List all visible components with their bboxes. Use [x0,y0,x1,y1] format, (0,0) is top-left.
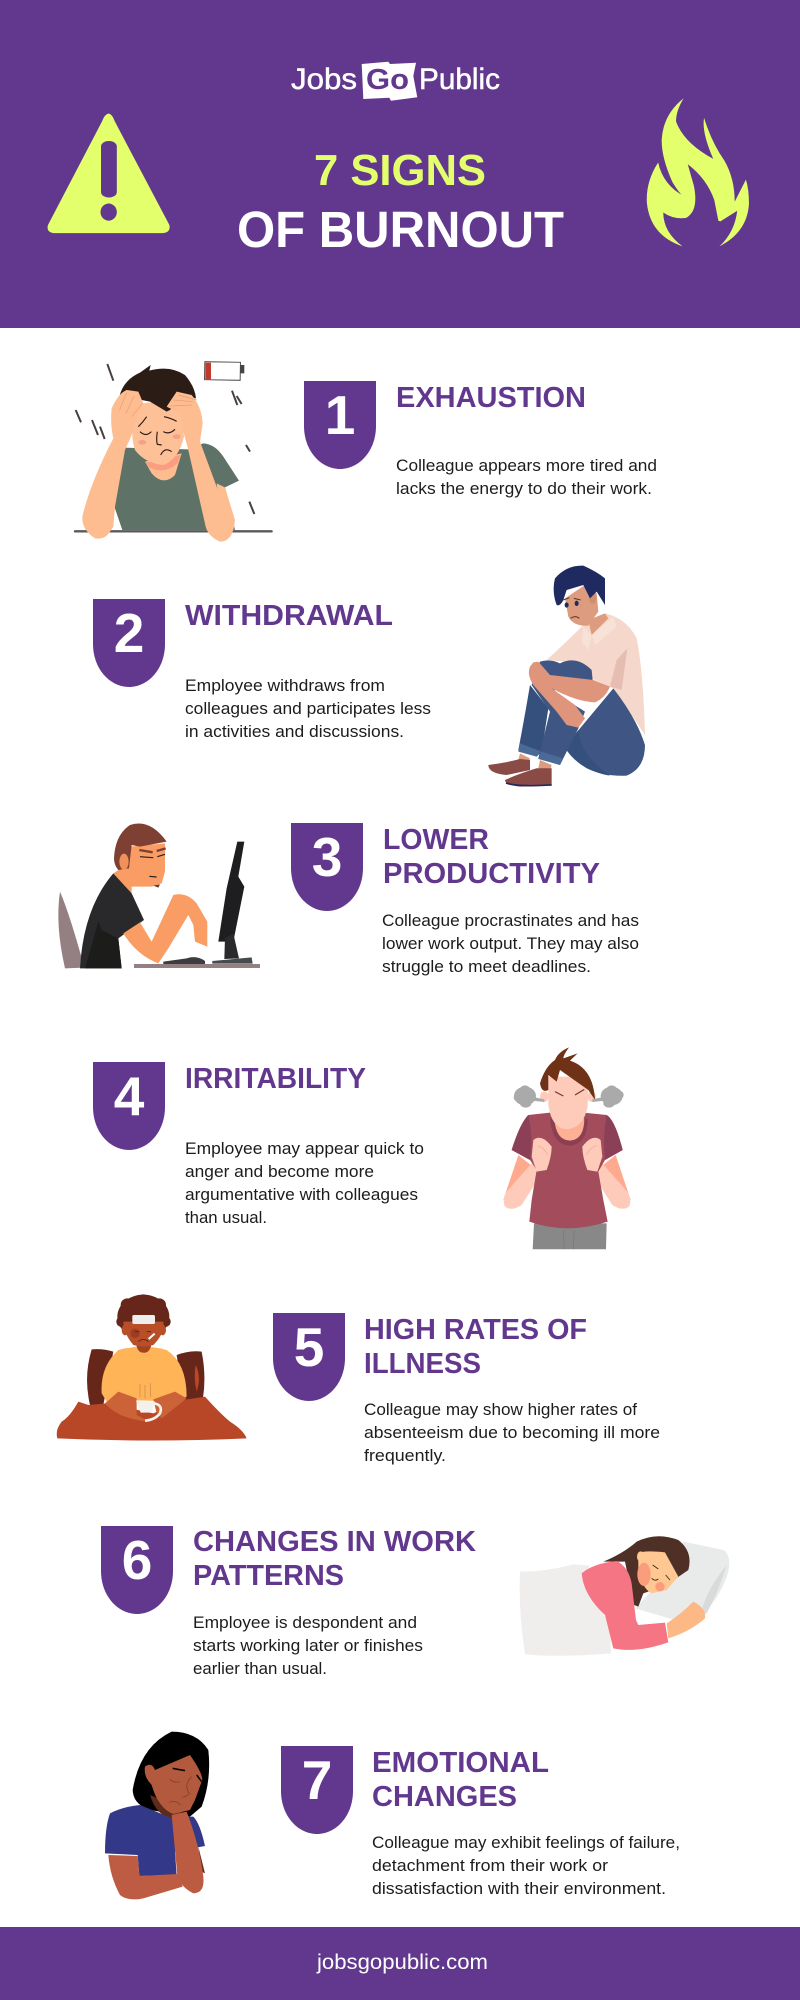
illustration: sad woman resting head on hand [105,1732,209,1899]
number badge 1: 1 [325,384,355,446]
heading [193,1526,476,1592]
panel: sign 5 high rates of illness [57,1294,660,1465]
illustration: sick person under blanket [57,1294,247,1440]
description: lacks the energy to do their work. [396,480,652,498]
number badge 4 [93,1062,165,1150]
description [382,912,639,976]
logo: Go [366,64,409,96]
description: colleagues and participates less [185,700,431,718]
heading: EXHAUSTION [396,382,586,414]
number badge 1 [304,381,376,469]
description [185,1140,424,1227]
number badge 5 [273,1313,345,1401]
description: argumentative with colleagues [185,1186,418,1204]
illustration: exhausted man [75,362,272,542]
heading [372,1747,549,1813]
description: frequently. [364,1447,446,1465]
description [185,677,431,741]
heading: CHANGES [372,1781,517,1813]
heading: PATTERNS [193,1560,344,1592]
icon: warning triangle [48,114,170,233]
description: Colleague procrastinates and has [382,912,639,930]
number badge 6: 6 [122,1529,152,1591]
description: struggle to meet deadlines. [382,958,591,976]
footer band [0,1927,800,2000]
icon: flame [647,98,749,246]
footer website: jobsgopublic.com [316,1951,488,1974]
description: starts working later or finishes [193,1637,423,1655]
title line 2: OF BURNOUT [237,201,564,258]
illustration: man hugging knees [488,566,645,787]
number badge 2 [93,599,165,687]
description: lower work output. They may also [382,935,639,953]
heading: ILLNESS [364,1348,481,1380]
illustration: woman sleeping [520,1536,729,1656]
illustration: angry man [503,1047,631,1249]
description: Colleague appears more tired and [396,457,657,475]
description: Colleague may exhibit feelings of failure, [372,1834,680,1852]
number badge 7: 7 [302,1749,332,1811]
number badge 2: 2 [114,602,144,664]
panel: sign 6 changes in work patterns [101,1526,729,1678]
panel: sign 7 emotional changes [105,1732,680,1899]
panel: sign 2 withdrawal [93,566,645,787]
logo: Jobs [291,63,357,96]
heading: WITHDRAWAL [185,600,393,632]
description: than usual. [185,1209,267,1227]
description: Employee is despondent and [193,1614,417,1632]
heading: HIGH RATES OF [364,1314,587,1346]
number badge 3: 3 [312,826,342,888]
panel: sign 1 exhaustion [75,362,657,542]
number badge 6 [101,1526,173,1614]
description: Colleague may show higher rates of [364,1401,637,1419]
description: Employee withdraws from [185,677,385,695]
heading: CHANGES IN WORK [193,1526,476,1558]
number badge 3 [291,823,363,911]
description: Employee may appear quick to [185,1140,424,1158]
description: absenteeism due to becoming ill more [364,1424,660,1442]
description [193,1614,423,1678]
description: dissatisfaction with their environment. [372,1880,666,1898]
number badge 7 [281,1746,353,1834]
description: anger and become more [185,1163,374,1181]
description: earlier than usual. [193,1660,327,1678]
heading: IRRITABILITY [185,1063,366,1095]
description: in activities and discussions. [185,723,404,741]
description [364,1401,660,1465]
panel: sign 3 lower productivity [58,823,639,976]
heading: LOWER [383,824,489,856]
heading: PRODUCTIVITY [383,858,600,890]
description: detachment from their work or [372,1857,609,1875]
title line 1: 7 SIGNS [314,146,486,195]
description [396,457,657,498]
heading: EMOTIONAL [372,1747,549,1779]
illustration: man at computer [58,824,260,968]
description [372,1834,680,1898]
heading [383,824,600,890]
logo: Public [419,63,500,96]
number badge 4: 4 [114,1065,145,1127]
panel: sign 4 irritability [93,1047,631,1249]
heading [364,1314,587,1380]
number badge 5: 5 [294,1316,324,1378]
logo [291,62,500,101]
header band [0,0,800,328]
